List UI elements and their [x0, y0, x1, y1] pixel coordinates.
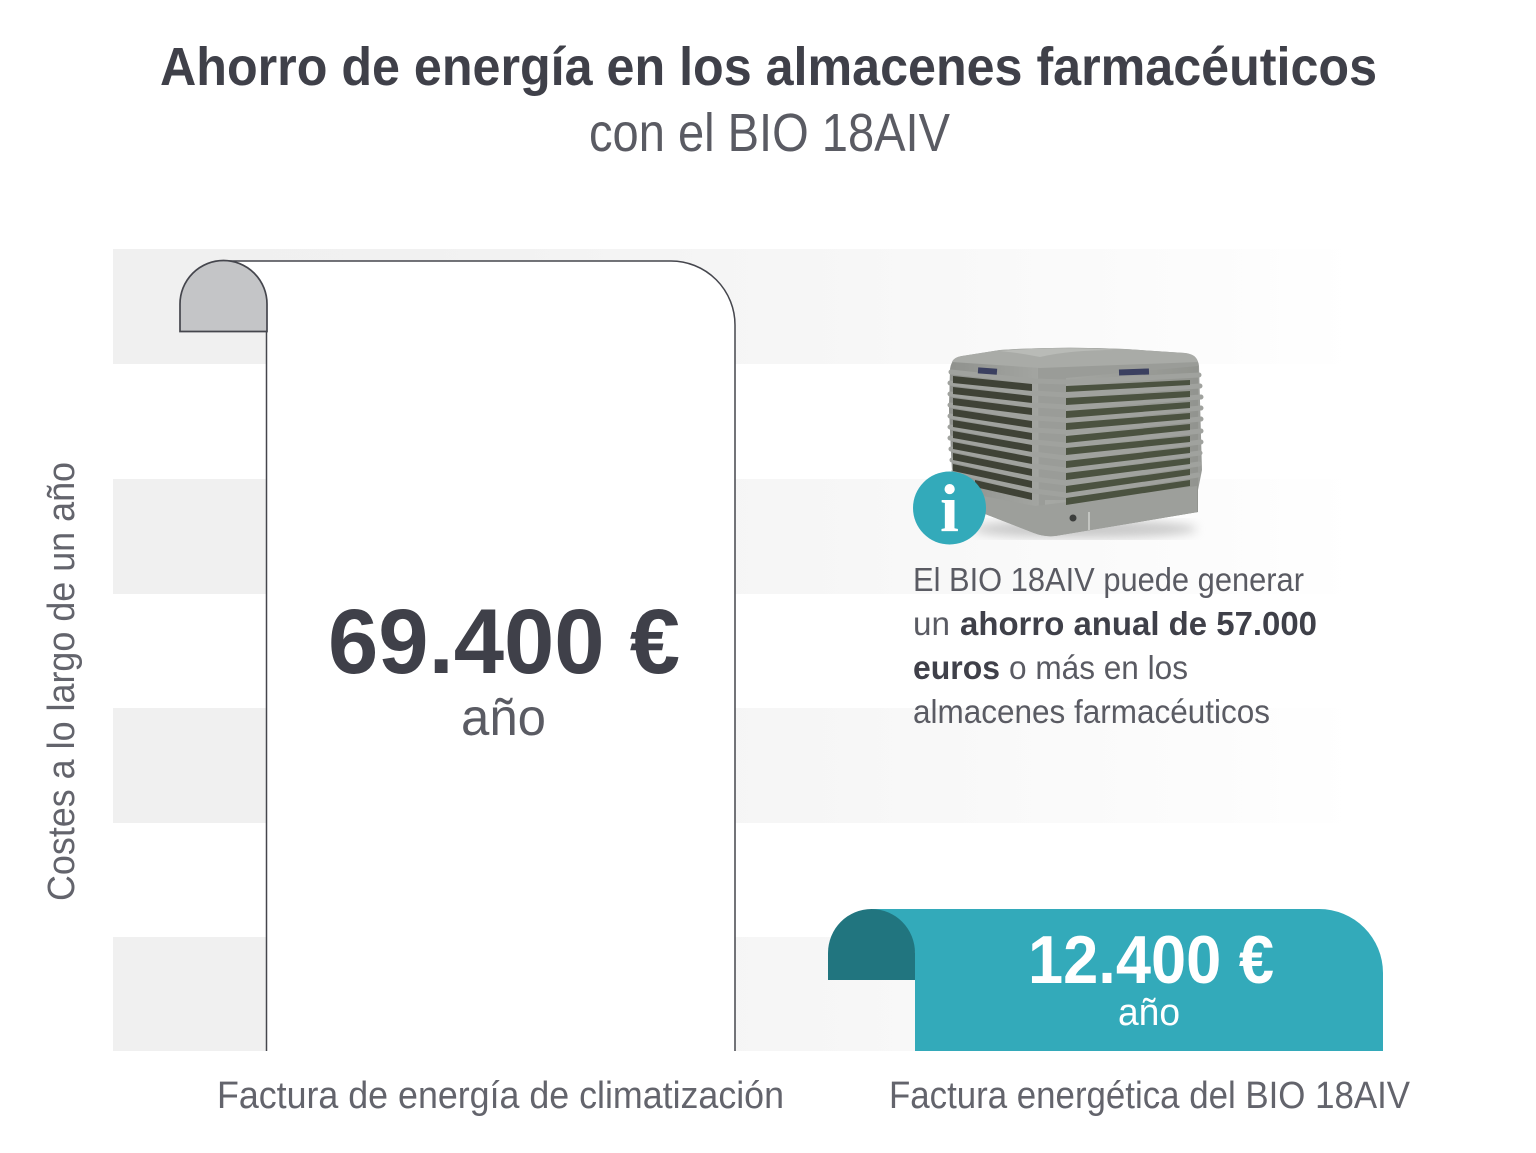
teal fold — [828, 909, 915, 980]
callout text: El BIO 18AIV puede generar — [913, 561, 1304, 598]
title main line: Ahorro de energía en los almacenes farmacéuticos — [160, 37, 1377, 97]
bar body — [225, 261, 735, 1051]
callout text: un — [913, 605, 950, 642]
bar unit: año — [461, 689, 546, 747]
x label: BIO 18AIV bill: Factura energética del BIO 18AIV — [889, 1075, 1411, 1117]
x label: current bill: Factura de energía de climatización — [217, 1075, 784, 1117]
bar: current energy bill — [180, 260, 735, 1051]
logo badges — [978, 367, 997, 375]
product image: BIO 18AIV cooler — [949, 348, 1202, 538]
left louvres — [953, 376, 1032, 500]
cooler base — [962, 486, 1197, 536]
title subtitle: con el BIO 18AIV — [589, 103, 950, 163]
teal unit: año — [1118, 992, 1180, 1034]
background bands — [113, 249, 1355, 1051]
cooler slats — [950, 372, 1201, 495]
callout text: ahorro anual de 57.000 — [960, 605, 1317, 642]
icon: info — [913, 470, 986, 546]
callout text — [913, 561, 1317, 730]
icon: info: i — [940, 470, 959, 546]
title — [160, 37, 1377, 163]
right louvres — [1066, 380, 1190, 505]
cooler lid — [952, 348, 1198, 368]
bar value: 69.400 € — [328, 591, 680, 693]
callout text: euros — [913, 649, 1000, 686]
teal bar body — [872, 909, 1383, 1051]
drain fitting — [1070, 514, 1076, 522]
teal value: 12.400 € — [1028, 922, 1274, 998]
callout text: o más en los — [1009, 649, 1188, 686]
cooler body — [949, 348, 1202, 536]
bar: BIO 18AIV energy bill — [828, 909, 1383, 1051]
bar fold — [180, 260, 267, 332]
callout text: almacenes farmacéuticos — [913, 693, 1270, 730]
y axis label: Costes a lo largo de un año — [41, 462, 83, 901]
